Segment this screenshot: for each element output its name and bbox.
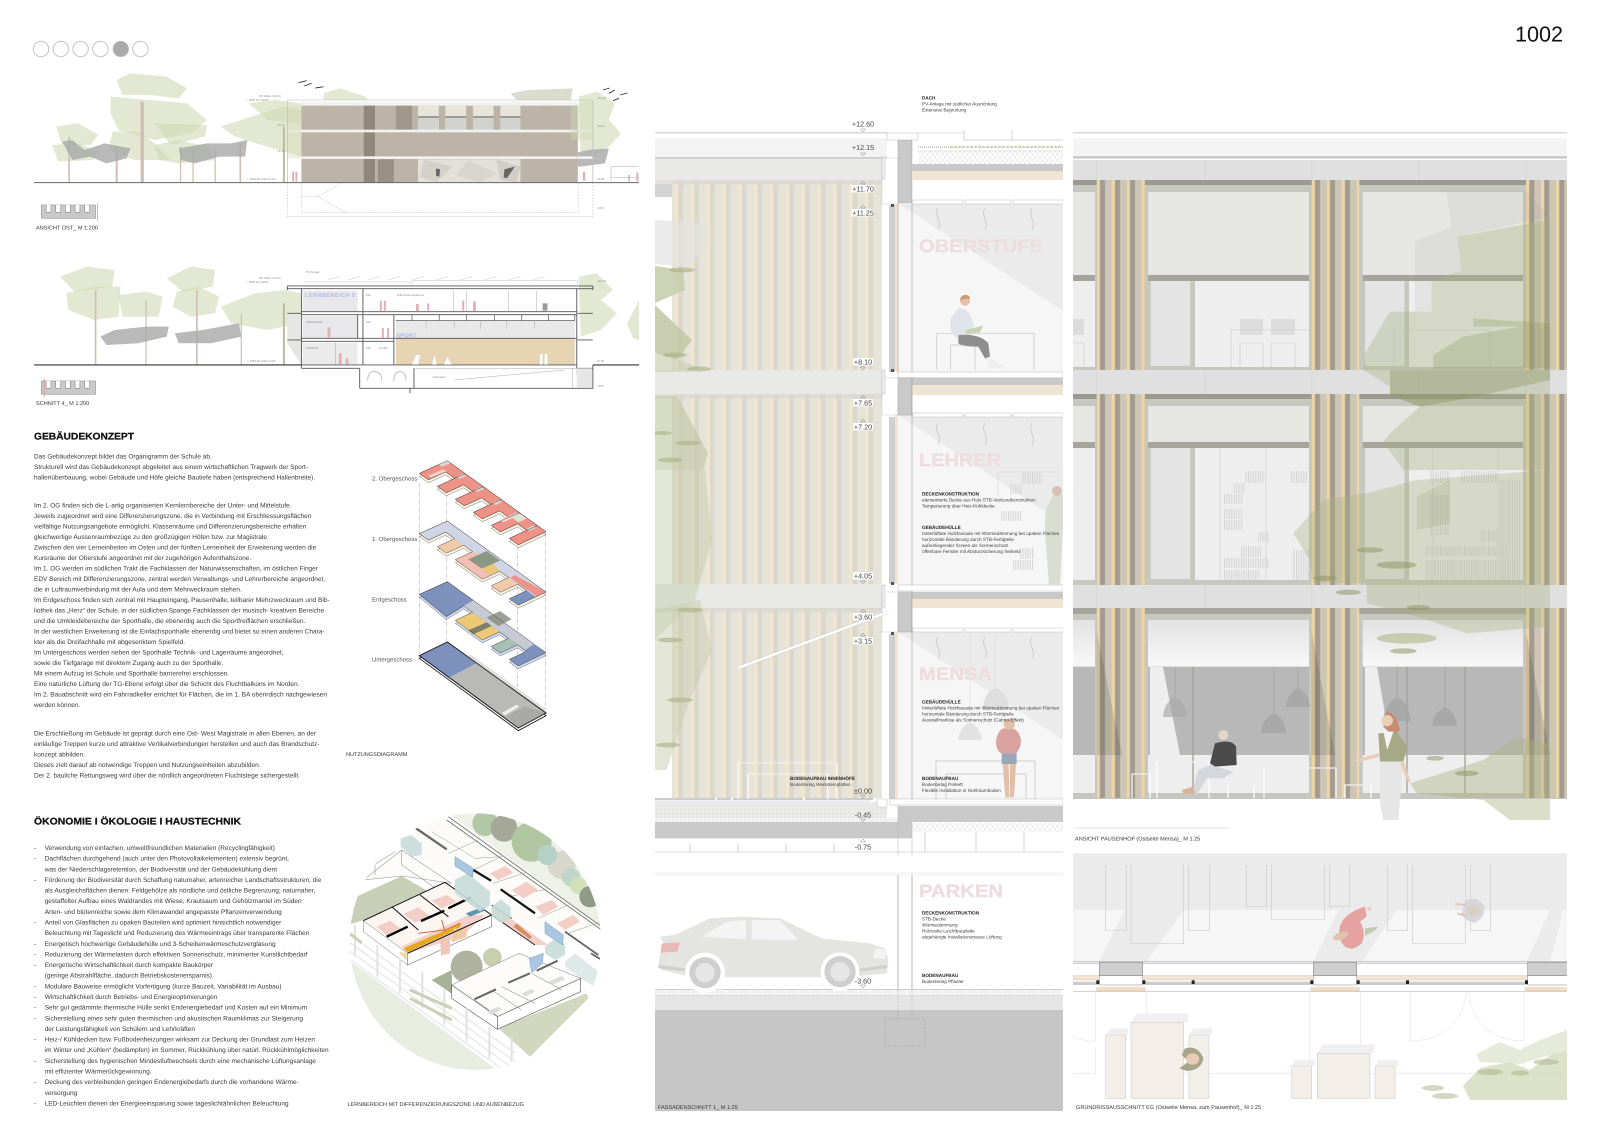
text block: Gebäudekonzept floors: Im Erdgeschoss finden sich zentral mit Haupteingang, Pausenhalle, teilbarer Mehrzweckraum und Bib- [34,597,330,604]
elevation level labels: -3,50 [597,206,604,210]
back wing [415,817,602,960]
section room labels [246,270,606,388]
list: Ökonomie bullets: Anteil von Glasflächen zu opaken Bauteilen wird optimiert hinsichtlich notwendiger [45,920,282,926]
ground line east [34,182,639,184]
note: Dach: Extensive Begrünung [922,108,967,113]
text block: Gebäudekonzept intro: Das Gebäudekonzept bildet das Organigramm der Schule ab. [34,453,212,460]
text block: Erschließung [34,730,319,780]
floor labels: 1. Obergeschoss [372,536,417,543]
level markers: +11.70 [852,184,874,194]
blue facades [455,857,563,973]
heading Gebäudekonzept: GEBÄUDEKONZEPT [34,430,134,442]
diagram: Nutzungsdiagramm exploded floors [419,461,546,731]
list: Ökonomie bullets: Verwendung von einfachen, umweltfreundlichen Materialien (Recyclingfähigkeit) [45,845,275,852]
section grey foliage [100,323,241,345]
elevation level labels: +8,10 [597,124,605,128]
note: Deckenkonstruktion Parken: DECKENKONSTRUKTION [922,910,980,916]
list: Ökonomie bullets: - [34,1037,36,1044]
section room labels: Flur [366,293,371,297]
note: Gebäudehülle Mensa: horizontale Bänderung durch STB-Fertigteile [922,712,1014,716]
text block: Gebäudekonzept floors: liothek das „Herz“ der Schule, in der südlichen Spange Fachklassen der musisch- kreativen Bereiche [34,608,325,615]
section building [287,286,593,393]
list: Ökonomie bullets: - [34,1005,36,1012]
list: Ökonomie bullets: - [34,877,36,884]
note: Gebäudehülle upper: öffenbare Fenster mit Absturzsicherung Seilnetz [922,549,1021,554]
note: Bodenaufbau Innenhöfe [790,776,855,787]
text block: Gebäudekonzept floors [33,503,330,709]
list: Ökonomie bullets: Energetisch hochwertige Gebäudehülle und 3-Scheibenwärmeschutzverglasung [45,941,276,948]
list: Ökonomie bullets: - [34,1058,36,1065]
list: Ökonomie bullets: - [34,1015,36,1022]
note: Gebäudehülle upper: hinterlüftete Holzfassade mit Wärmedämmung bei opaken Flächen [922,531,1060,536]
foundation [885,990,925,1046]
note: Gebäudehülle upper [922,525,1060,554]
section room labels: Flur [366,320,371,324]
Lehrer shelf and Mensa lamp background [958,472,1063,740]
elevation level labels [246,94,606,210]
elevation level labels: + 1552,50 ü.NN ±0,00 [247,177,276,181]
floor: 1. Obergeschoss [419,521,546,608]
note: Bodenaufbau Mensa: BODENAUFBAU [922,776,959,781]
note: Dach: DACH [922,96,936,100]
building facade [287,100,593,183]
list: Ökonomie bullets: - [34,951,36,958]
section room labels: OK Attika +12,60 [259,276,281,280]
trees behind east elevation [52,73,621,163]
section room labels: Klassenraum [306,320,323,324]
list: Ökonomie bullets: mit effizienter Wärmerückgewinnung. [45,1068,152,1076]
list: Ökonomie bullets: Sicherstellung des hygienischen Mindestluftwechsels durch eine mechanische Lüftungsanlage [45,1058,316,1065]
level markers: -0.45 [855,810,871,820]
note: Bodenaufbau Mensa: Flexible Installation in Hohlraumboden [922,788,1001,793]
air flow arrows [937,208,1033,659]
main block [363,882,492,965]
note: Deckenkonstruktion: DECKENKONSTRUKTION [922,492,980,496]
list: Ökonomie bullets: versorgung [45,1090,78,1097]
section room labels: SPORT [396,332,417,340]
floor labels: Erdgeschoss [372,596,407,604]
lower structure [655,761,1063,855]
teal volumes [401,835,598,987]
page progress circles [33,41,148,57]
section room labels: -3,50 [597,384,604,388]
pendant lamps [1163,667,1457,733]
list: Ökonomie bullets: gestaffelter Aufbau eines Waldrandes mit Wiese, Krautsaum und Gehölzmantel im Süden [45,898,302,905]
list: Ökonomie bullets: Dachflächen durchgehend (auch unter den Photovoltaikelementen) extensiv begrünt, [45,856,289,863]
caption Ansicht Pausenhof: ANSICHT PAUSENHOF (Ostseite Mensa)_ M 1:25 [1075,836,1200,842]
seated person Pausenhof [1182,730,1237,795]
list: Ökonomie bullets: - [34,920,36,926]
fence [348,925,515,1078]
isometric circle: Lernbereich [350,813,600,1070]
right side tree overlay [571,100,593,140]
birds [299,81,627,101]
basement dashed outline [287,183,593,217]
list: Ökonomie bullets: der Leistungsfähigkeit von Schülern und Lehrkräften [45,1026,195,1033]
people east elevation [292,172,638,182]
level markers: -3.60 [855,976,871,986]
level markers: +12.60 [852,120,874,128]
note: Deckenkonstruktion: Temperierung über Heiz-Kühldecke [922,504,995,508]
floor plan excerpt [1073,853,1573,1100]
room label Oberstufe: OBERSTUFE [919,236,1043,256]
rooms background [898,180,1063,799]
person top view olive [1179,1048,1203,1071]
note: Bodenaufbau Innenhöfe: BODENAUFBAU INNENHÖFE [790,776,855,781]
list: Ökonomie bullets: Förderung der Biodiversität durch Schaffung naturnaher, artenreicher Landschaftsstrukturen, die [45,877,322,884]
awnings and mensa interior [1073,620,1523,793]
indoor tables [1106,1013,1398,1098]
door swings and grids [1073,992,1524,1041]
ground layers [655,995,1063,1010]
text block: Erschließung: Dieses zielt darauf ab notwendige Treppen und Nutzungseinheiten abzubilden. [34,762,261,769]
note: Deckenkonstruktion Parken: STB-Decke [922,916,946,922]
note: Deckenkonstruktion: elementierte Decke aus Holz-STB-Verbundkonstruktion [922,498,1036,502]
elevation Pausenhof [1073,132,1572,830]
section room labels: Umkleide [306,346,318,350]
level markers: +3.60 [854,612,872,622]
section room labels: Geräte [379,346,388,350]
level markers: +7.20 [854,422,872,432]
tree canopy over right bays [1363,192,1550,470]
note: Gebäudehülle upper: außenliegender Screen als Sonnenschutz [922,543,1009,548]
standing person in Lehrer room [1045,486,1064,585]
note: Dach: PV-Anlage mit südlicher Ausrichtung [922,102,997,107]
note: Deckenkonstruktion Parken [922,910,1002,940]
text block: Gebäudekonzept floors: Im 1. OG werden im südlichen Trakt die Fachklassen der Naturwissenschaften, im östlichen Finger [34,566,319,573]
round trees [451,811,601,983]
section room labels: + 1552,10 ü.NHN [246,280,268,284]
section room labels: ±0,00 [597,359,605,363]
slabs and wall hatch [890,140,1063,805]
note: Deckenkonstruktion Parken: Holzwolle-Leichtbauplatte [922,928,975,934]
list: Ökonomie bullets: Sicherstellung eines sehr guten thermischen und akustischen Raumklimas zur Steigerung [45,1015,303,1022]
climbing wall [418,159,520,183]
note: Bodenaufbau Parken: Bodenbelag Pflaster [922,979,964,984]
list: Ökonomie bullets: Sehr gut gedämmte thermische Hülle senkt Endenergiebedarf und Kosten auf ein Minimum [45,1005,307,1012]
ceiling projection bands [1073,853,1573,962]
level markers: +3.15 [854,636,872,646]
text block: Erschließung: Die Erschließung im Gebäude ist geprägt durch eine Ost- West Magistrale in allen Ebenen, an der [34,730,317,737]
level markers: ±0.00 [854,786,872,796]
caption Lernbereich: LERNBEREICH MIT DIFFERENZIERUNGSZONE UND AUßENBEZUG [348,1101,524,1108]
grey tree foliage [62,140,609,167]
parking section [655,873,1063,1111]
level markers: +7.65 [854,398,872,408]
facade line in plan [1073,962,1573,991]
list: Ökonomie bullets: im Winter und „Kühlen“ (bedämpfen) im Sommer, Rückkühlung über natürl. Rückkühlmöglichkeiten [45,1047,329,1054]
list: Ökonomie bullets: LED-Leuchten dienen der Energieeinsparung sowie tageslichtähnlichen Beleuchtung [45,1100,289,1107]
floor labels [372,476,417,664]
list: Ökonomie bullets: Heiz-/ Kühldecken bzw. Fußbodenheizungen wirksam zur Deckung der Grundlast zum Heizen [45,1037,315,1044]
window bays upper floors [1073,180,1571,798]
text block: Gebäudekonzept floors: EDV Bereich mit Differenzierungszone, zentral werden Verwaltungs- und Lehrerbereiche angeordnet, [34,576,325,583]
note: Gebäudehülle Mensa: hinterlüftete Holzfassade mit Wärmedämmung bei opaken Flächen [922,706,1060,710]
key plan east [41,203,98,221]
text block: Gebäudekonzept floors: Zwischen den vier Lerneinheiten im Osten und der fünften Lerneinheit der Erweiterung werden die [34,545,317,552]
list: Ökonomie bullets: - [34,962,36,969]
facade section timber cladding [655,180,888,798]
elevation: Ansicht Ost [34,73,639,221]
list: Ökonomie bullets: Reduzierung der Wärmelasten durch effektiven Sonnenschutz, minimierter Kunstlichtbedarf [45,951,308,958]
elevation level labels: ±0,00 [597,177,605,181]
section room labels: PV-Anlage [306,270,320,274]
landscape green [350,814,600,1070]
tree trunks [68,102,285,183]
neighbour structure [611,167,639,183]
level markers: +4.05 [854,572,872,580]
paving [655,988,1063,990]
key plan section [41,378,96,397]
dashed connectors [419,483,545,727]
text block: Gebäudekonzept floors: Im 2. Bauabschnitt wird ein Fahrradkeller errichtet für Flächen, die im 1. BA oberirdisch nachgewiesen [34,692,327,699]
text block: Gebäudekonzept floors: Kursräume der Oberstufe angeordnet mit der zugehörigen Aufenthaltszone. [34,555,251,562]
room label Lehrer: LEHRER [919,450,1001,470]
seated person [937,295,1034,370]
text block: Gebäudekonzept floors: die in Luftraumverbindung mit der Aula und dem Mehrweckraum stehen. [34,587,242,594]
table outlines in projection [1106,865,1491,943]
level markers [851,120,874,988]
caption Nutzungsdiagramm: NUTZUNGSDIAGRAMM [346,752,408,758]
text block: Gebäudekonzept floors: vielfältige Nutzungsangebote ermöglicht. Klassenräume und Differenzierungsbereiche erhalten [34,524,307,531]
note: Dach [922,96,997,113]
list: Ökonomie bullets: Beleuchtung mit Tageslicht und Reduzierung des Wärmeeintrags über transparente Flächen [45,930,310,937]
text block: Gebäudekonzept intro: hallenüberbauung, wobei Gebäude und Höfe gleiche Bautiefe haben (entsprechend Hallenbreite). [34,474,315,481]
facade section drawing [652,116,1074,855]
list: Ökonomie bullets [34,845,329,1107]
text block: Gebäudekonzept floors: werden können. [33,702,80,709]
note: Gebäudehülle upper: horizontale Bänderung durch STB-Fertigteile [922,537,1014,542]
level markers: +11.25 [852,208,874,218]
list: Ökonomie bullets: - [34,941,36,948]
floor: Untergeschoss [419,642,546,731]
ground line section [34,364,639,366]
plan tree [1422,1030,1567,1100]
list: Ökonomie bullets: - [34,994,36,1001]
tree in front of facade section [652,220,712,798]
elevation level labels: +12,15 [597,96,606,100]
floor labels: Untergeschoss [372,656,412,664]
roof PV outline [303,277,578,286]
slanted awning arm [738,612,888,668]
text block: Erschließung: konzept abbilden. [34,752,85,759]
lower wing [452,953,581,1029]
list: Ökonomie bullets: Wirtschaftlichkeit durch Betriebs- und Energieoptimierungen [45,994,218,1001]
ground line Pausenhof [1073,798,1567,799]
note: Deckenkonstruktion [922,492,1036,508]
caption Ansicht Ost: ANSICHT OST_ M 1:200 [36,226,98,232]
note: Bodenaufbau Parken: BODENAUFBAU [922,973,959,978]
text block: Gebäudekonzept floors: Mit einem Aufzug ist Schule und Sporthalle barrierefrei erschlossen. [34,671,229,678]
roof edge and concrete bands [1073,132,1571,608]
caption Fassadenschnitt: FASSADENSCHNITT 1_ M 1:25 [658,1105,738,1111]
elevation level labels: +4,05 [277,149,285,153]
caption Schnitt 4: SCHNITT 4_ M 1:200 [36,401,89,407]
person top view grey [1455,899,1484,923]
text block: Gebäudekonzept floors: Im 2. OG finden sich die L-artig organisierten Kernlernbereiche der Unter- und Mittelstufe. [34,503,292,510]
interior desks upper [1073,319,1520,580]
note: Gebäudehülle upper: GEBÄUDEHÜLLE [922,525,961,530]
car [658,917,888,993]
sports figures [412,354,547,365]
elevation level labels: OK Attika +12,60 [259,94,281,98]
list: Ökonomie bullets: was der Niederschlagsretention, der Biodiversität und der Gebäudekühlung dient [44,866,277,873]
note: Bodenaufbau Parken [922,973,964,984]
note: Deckenkonstruktion Parken: abgehängte Installationstrasse Lüftung [922,934,1002,940]
section: Schnitt 4 [34,267,639,397]
level markers: -0.75 [855,842,871,852]
list: Ökonomie bullets: Energetische Wirtschaftlichkeit durch kompakte Baukörper [45,962,214,969]
section room labels: + 1552,50 ü.NN ±0,00 [247,359,276,363]
elevation level labels: + 1552,10 ü.NHN [246,98,268,102]
note: Gebäudehülle Mensa: Ausstellmarkise als Sonnenschutz (Cabrio-Effekt) [922,718,1024,722]
text block: Gebäudekonzept intro: Strukturell wird das Gebäudekonzept abgeleitet aus einem wirtschaftlichen Tragwerk der Sport- [34,464,308,471]
room label Parken: PARKEN [919,881,1003,901]
heading Ökonomie: ÖKONOMIE I ÖKOLOGIE I HAUSTECHNIK [34,816,241,828]
outdoor furniture [1131,761,1372,798]
text block: Gebäudekonzept floors: kter als die Dreifachhalle mit abgesenktem Spielfeld. [34,639,185,646]
standing person in Mensa [996,718,1021,797]
level markers: +8.10 [854,358,872,366]
section room labels: Flur [366,346,371,350]
plan number: 1002 [1515,22,1563,46]
room label Mensa: MENSA [919,664,992,684]
note: Gebäudehülle Mensa: GEBÄUDEHÜLLE [922,700,961,704]
list: Ökonomie bullets: - [34,845,36,852]
trees behind section [60,267,639,340]
text block: Gebäudekonzept floors: Im Untergeschoss werden neben der Sporthalle Technik- und Lagerräume angeordnet, [34,650,284,657]
timber columns [1097,180,1572,798]
roof build-up [886,130,1063,164]
window and wall column [882,157,898,810]
section room labels: Differenzierungszone [397,293,425,297]
section room labels: LERNBEREICH 5 [305,293,355,299]
note: Bodenaufbau Innenhöfe: Bodenbelag Werksteinplatten [790,782,851,787]
floor: Erdgeschoss [419,582,546,669]
text block: Erschließung: Der 2. bauliche Rettungsweg wird über die nördlich angeordneten Fluchtstege sichergestellt. [34,773,300,780]
note: Bodenaufbau Mensa [922,776,1001,793]
text block: Gebäudekonzept floors: Jeweils zugeordnet wird eine Differenzierungszone, die in Verbindung mit Erschliessungsflächen [34,513,312,520]
text block: Gebäudekonzept floors: sowie die Tiefgarage mit direktem Zugang auch zu der Sporthalle. [34,660,224,667]
text block: Gebäudekonzept floors: gleichwertige Aussenraumbezüge zu den großzügigen Höfen bzw. zur Magistrale. [34,534,269,541]
floor labels: 2. Obergeschoss [372,476,417,482]
section tree trunks [95,290,285,365]
level markers: +12.15 [852,143,874,152]
parked cars in section [368,372,406,381]
elevation level labels: +8,10 [277,123,285,127]
text block: Erschließung: einläufige Treppen kurze und attraktive Vertikalverbindungen herstellen und auch das Brandschutz- [34,741,319,748]
person top view red [1332,907,1378,949]
section people [328,301,476,365]
text block: Gebäudekonzept floors: In der westlichen Erweiterung ist die Einfachsporthalle ebenerdig und bietet so einen anderen Chara- [34,629,325,636]
list: Ökonomie bullets: als Ausgleichsflächen dienen: Feldgehölze als nördliche und östliche Begrenzung; naturnaher, [45,888,316,895]
list: Ökonomie bullets: Arten- und blütenreiche sowie dem Klimawandel angepasste Pflanzenverwendung [45,909,282,916]
section room labels: Fahrräder [433,375,446,379]
facade section roof edge [655,132,887,180]
list: Ökonomie bullets: Modulare Bauweise ermöglicht Vorfertigung (kurze Bauzeit, Variabilität im Ausbau) [45,983,282,990]
section room labels: +12,15 [597,279,606,283]
note: Bodenaufbau Mensa: Bodenbelag Parkett [922,782,963,787]
list: Ökonomie bullets: Deckung des verbleibenden geringen Endenergiebedarfs durch die vorhandene Wärme- [45,1079,299,1086]
text block: Gebäudekonzept floors: Eine natürliche Lüftung der TG-Ebene erfolgt über die Schicht des Fluchtbalkons im Norden. [34,681,300,688]
list: Ökonomie bullets: (geringe Abstrahlfläche, dadurch Betriebskostenersparnis) [45,973,212,980]
list: Ökonomie bullets: - [34,1079,36,1086]
left wing [363,850,452,890]
list: Ökonomie bullets: - [34,856,36,863]
text block: Gebäudekonzept floors: und die Umkleidebereiche der Sporthalle, die ebenerdig auch die Sportfreiflächen erschließen. [34,618,306,625]
note: Gebäudehülle Mensa [922,700,1060,722]
caption Grundrissausschnitt: GRUNDRISSAUSSCHNITT EG (Ostseite Mensa, zum Pausenhof)_ M 1:25 [1076,1104,1261,1111]
standing woman Pausenhof [1353,712,1411,820]
text block: Gebäudekonzept intro [34,453,315,481]
note: Deckenkonstruktion Parken: Wärmedämmung [922,922,958,928]
list: Ökonomie bullets: - [34,983,36,990]
list: Ökonomie bullets: - [34,1100,36,1107]
floor: 2. Obergeschoss [419,461,546,548]
